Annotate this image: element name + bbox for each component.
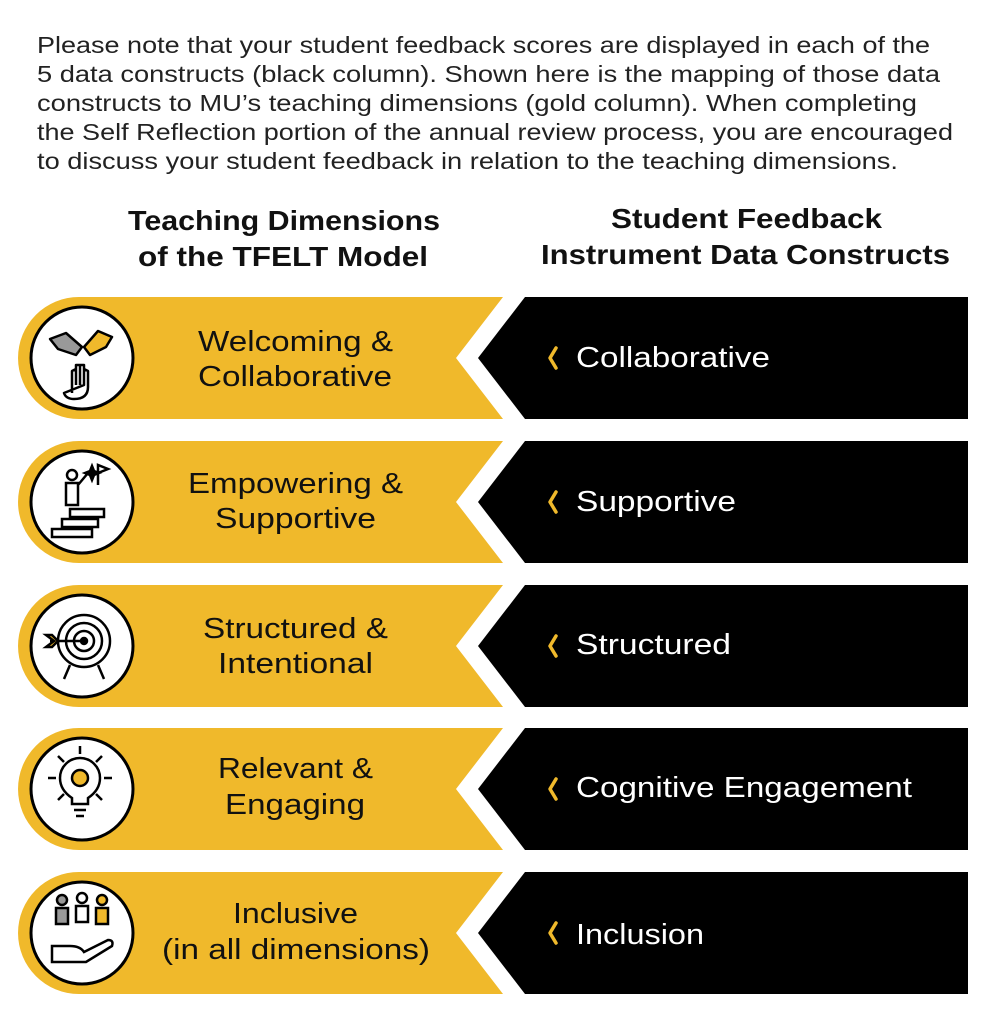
row 5: inclusive (18, 872, 968, 994)
heading: student feedback: Student Feedback (611, 203, 882, 234)
icon: hands (50, 331, 112, 399)
gold label: (in all dimensions) (162, 934, 430, 966)
icon: target (46, 615, 110, 679)
gold label (188, 468, 403, 535)
gold label: Intentional (218, 648, 373, 680)
heading: teaching dimensions: of the TFELT Model (138, 241, 428, 272)
heading: teaching dimensions (128, 205, 440, 272)
intro paragraph: Please note that your student feedback scores are displayed in each of the (37, 32, 930, 58)
gold label: Welcoming & (198, 326, 393, 358)
gold label: Collaborative (198, 361, 392, 393)
row 3: structured & intentional (18, 585, 968, 707)
gold label: Supportive (215, 503, 376, 535)
black label: Cognitive Engagement (576, 772, 912, 804)
icon: lightbulb (48, 746, 112, 816)
intro paragraph: to discuss your student feedback in relation to the teaching dimensions. (37, 148, 898, 174)
heading: student feedback (541, 203, 950, 270)
black label: Collaborative (576, 342, 770, 374)
row 2: empowering & supportive (18, 441, 968, 563)
gold label (203, 613, 388, 680)
row 4: relevant & engaging (18, 728, 968, 850)
heading: student feedback: Instrument Data Constructs (541, 239, 950, 270)
gold label: Relevant & (218, 753, 373, 785)
icon: stairs (52, 465, 108, 537)
black label: Structured (576, 629, 731, 661)
gold label: Structured & (203, 613, 388, 645)
heading: teaching dimensions: Teaching Dimensions (128, 205, 440, 236)
intro paragraph (37, 32, 953, 174)
gold label: Engaging (225, 789, 365, 821)
intro paragraph: constructs to MU’s teaching dimensions (gold column). When completing (37, 90, 917, 116)
intro paragraph: the Self Reflection portion of the annual review process, you are encouraged (37, 119, 953, 145)
gold label (218, 753, 373, 821)
black label: Inclusion (576, 919, 704, 951)
gold label (162, 898, 430, 966)
gold label: Inclusive (233, 898, 358, 930)
row 1: welcoming & collaborative (18, 297, 968, 419)
black label: Supportive (576, 486, 736, 518)
gold label: Empowering & (188, 468, 403, 500)
gold label (198, 326, 393, 393)
icon: people on hand (52, 893, 112, 962)
intro paragraph: 5 data constructs (black column). Shown here is the mapping of those data (37, 61, 940, 87)
